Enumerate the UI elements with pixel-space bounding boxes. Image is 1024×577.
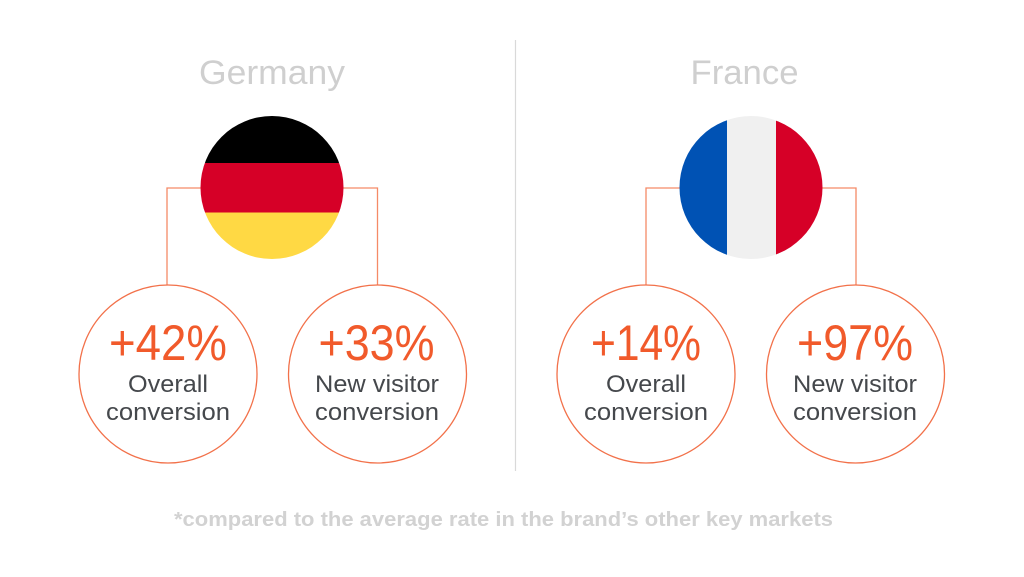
- icon: German flag: [200, 116, 344, 260]
- stat circle: +33% new visitor conversion: +33%: [318, 315, 434, 371]
- stat circle: +33% new visitor conversion: conversion: [315, 399, 439, 426]
- stat circle: +97% new visitor conversion: +97%: [797, 315, 913, 371]
- stat circle: +97% new visitor conversion: conversion: [793, 399, 917, 426]
- connector lines: Germany: [167, 188, 378, 285]
- heading: Germany: Germany: [199, 54, 345, 92]
- connector lines: France: [646, 188, 856, 285]
- stat circle: +42% overall conversion: conversion: [106, 399, 230, 426]
- stat circle: +42% overall conversion: [79, 285, 257, 463]
- stat circle: +42% overall conversion: +42%: [109, 315, 227, 371]
- stat circle: +14% overall conversion: [557, 285, 735, 463]
- stat circle: +97% new visitor conversion: New visitor: [793, 371, 917, 398]
- panel: France: [557, 54, 944, 463]
- stat circle: +14% overall conversion: Overall: [606, 371, 686, 398]
- stat circle: +42% overall conversion: Overall: [128, 371, 208, 398]
- stat circle: +14% overall conversion: conversion: [584, 399, 708, 426]
- heading: France: France: [690, 54, 798, 92]
- footnote: *compared to the average rate in the brand’s other key markets: [174, 509, 833, 531]
- icon: French flag: [679, 116, 824, 260]
- panel: Germany: [79, 54, 466, 463]
- stat circle: +14% overall conversion: +14%: [591, 315, 701, 371]
- stat circle: +97% new visitor conversion: [766, 285, 944, 463]
- stat circle: +33% new visitor conversion: New visitor: [315, 371, 439, 398]
- stat circle: +33% new visitor conversion: [288, 285, 466, 463]
